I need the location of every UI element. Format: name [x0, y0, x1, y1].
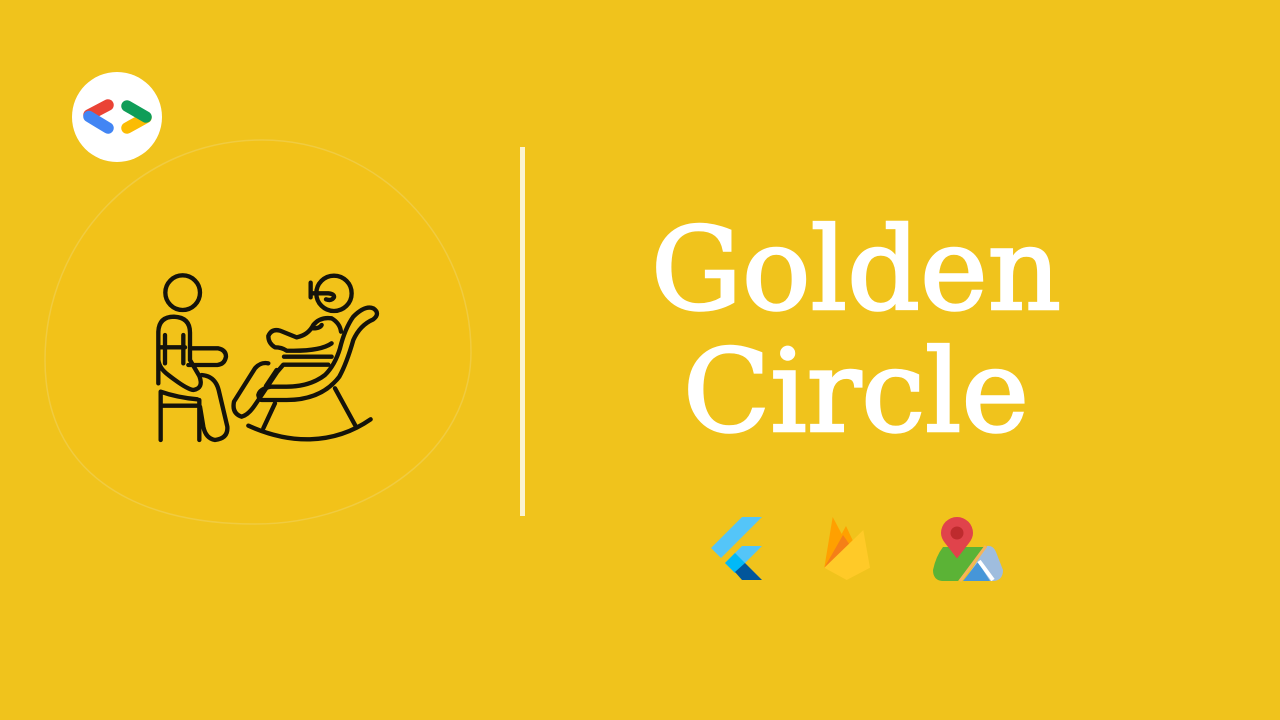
blob circle	[45, 140, 471, 524]
icon: google maps	[933, 517, 1003, 581]
icon: flutter	[711, 517, 762, 580]
icon: firebase	[824, 517, 870, 580]
title: Golden Circle	[651, 203, 1061, 458]
title: Golden Circle: Golden	[651, 203, 1061, 336]
seated person	[158, 275, 227, 440]
title: Golden Circle: Circle	[683, 325, 1029, 458]
icon: therapist and patient in rocking chair	[158, 275, 377, 440]
logo badge	[72, 72, 162, 162]
patient in rocking chair	[234, 276, 377, 439]
vertical divider	[520, 147, 525, 516]
